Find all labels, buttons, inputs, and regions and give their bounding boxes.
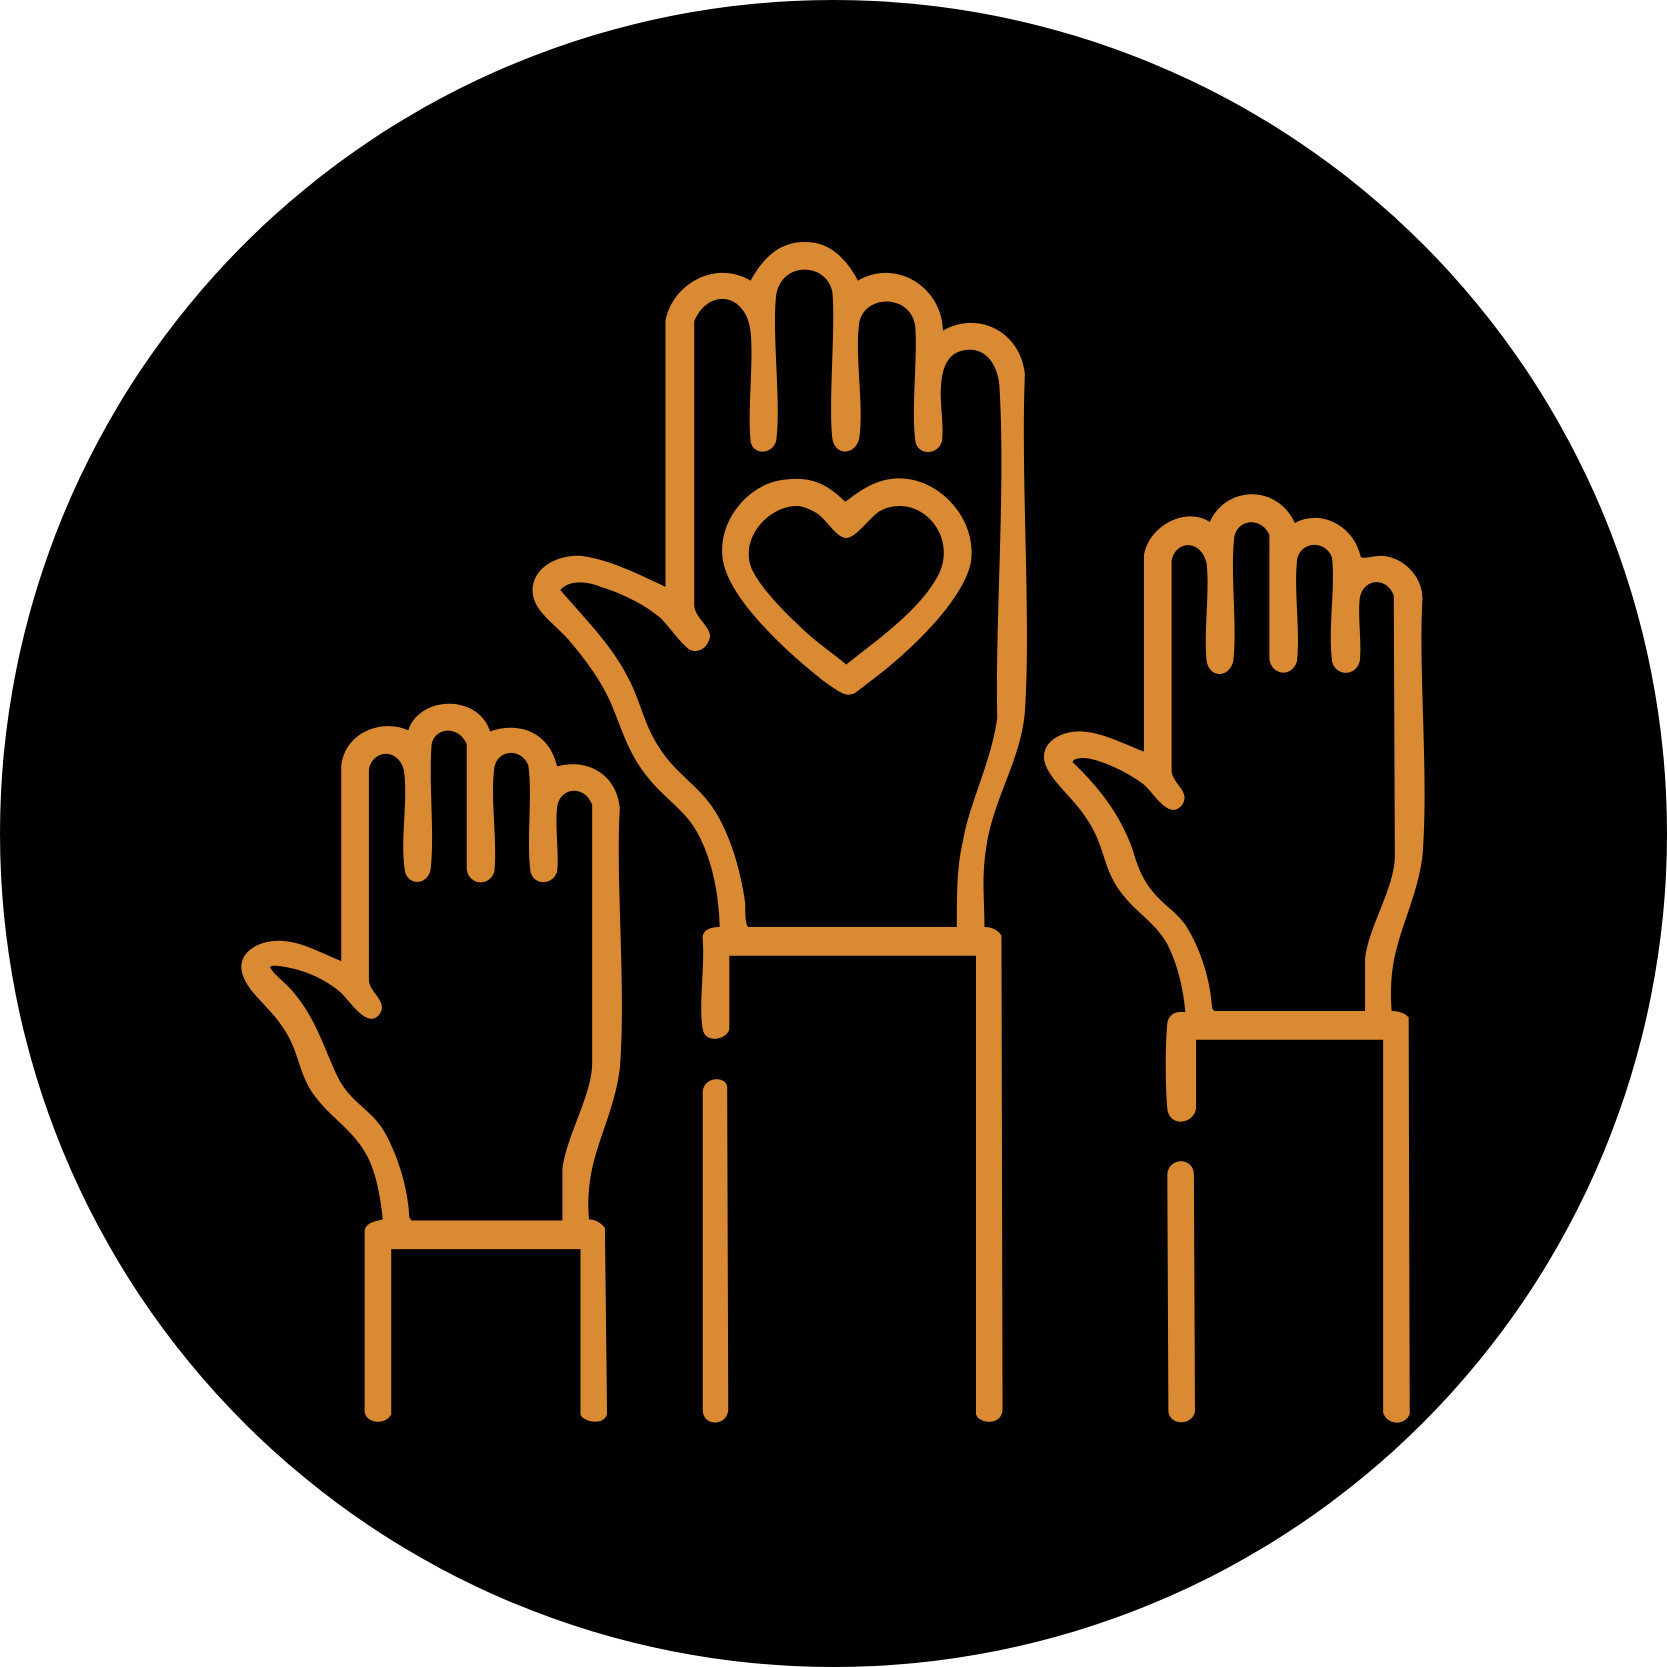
icon: center raised hand with sleeve — [533, 242, 1027, 1422]
center sleeve fold bar — [703, 1079, 728, 1422]
icon: heart on center palm — [722, 478, 972, 695]
icon: left raised hand with sleeve — [241, 704, 622, 1422]
icon: right raised hand with sleeve — [1044, 494, 1425, 1423]
right sleeve fold bar — [1167, 1161, 1195, 1422]
